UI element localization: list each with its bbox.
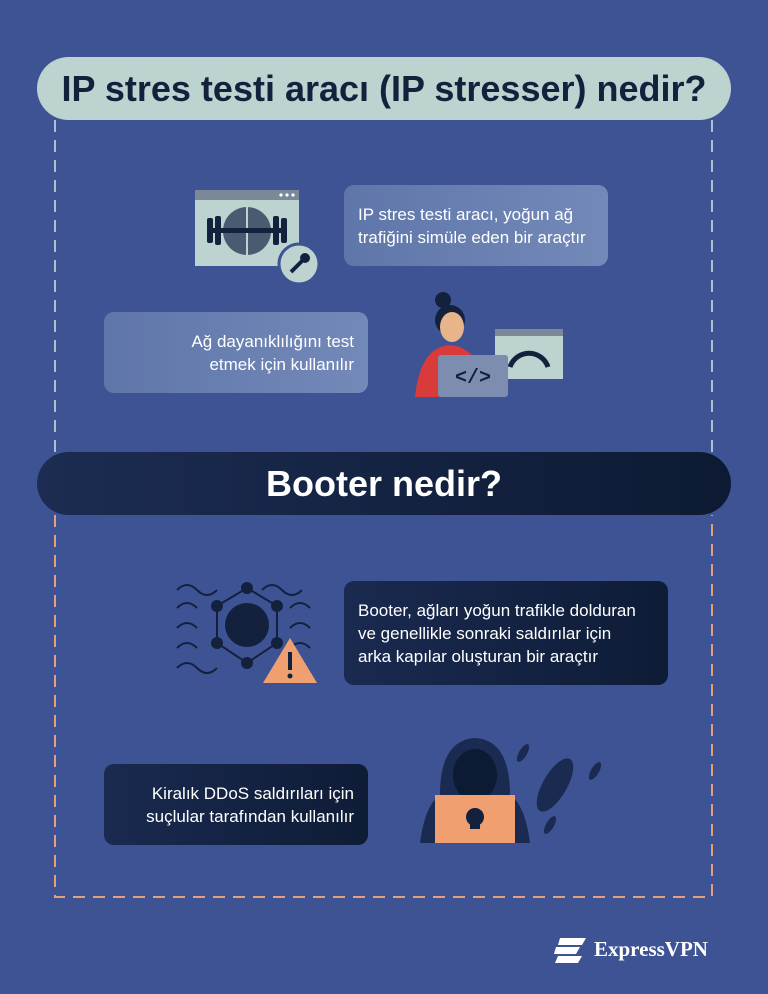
icon: browser with globe and dumbbell: [195, 190, 318, 282]
logo: ExpressVPN: [554, 936, 708, 963]
box: stres testi description: trafiğini simüle eden bir araçtır: [358, 228, 586, 246]
box: booter description: arka kapılar oluşturan bir araçtır: [358, 646, 598, 666]
box: stres testi description: [344, 185, 608, 266]
box: criminals: suçlular tarafından kullanılır: [146, 806, 354, 826]
box: usage: Ağ dayanıklılığını test: [191, 332, 354, 350]
heading: Booter: Booter nedir?: [266, 462, 502, 504]
title: [37, 57, 731, 120]
icon: hacker with bombs: [420, 738, 602, 843]
box: booter description: ve genellikle sonraki saldırılar için: [358, 624, 611, 642]
icon: network globe with warning: [176, 582, 317, 683]
icon: woman with laptop: [415, 292, 563, 397]
box: criminals: Kiralık DDoS saldırıları için: [152, 784, 354, 802]
box: criminals: [104, 764, 368, 845]
icon: woman with laptop: </>: [455, 367, 491, 390]
box: booter description: [344, 581, 668, 685]
heading: Booter: [37, 452, 731, 515]
logo: ExpressVPN: ExpressVPN: [594, 936, 708, 960]
box: booter description: Booter, ağları yoğun trafikle dolduran: [358, 600, 636, 620]
box: usage: etmek için kullanılır: [209, 354, 354, 374]
title: IP stres testi aracı (IP stresser) nedir?: [62, 68, 706, 108]
box: stres testi description: IP stres testi aracı, yoğun ağ: [358, 204, 573, 224]
box: usage: [104, 312, 368, 393]
